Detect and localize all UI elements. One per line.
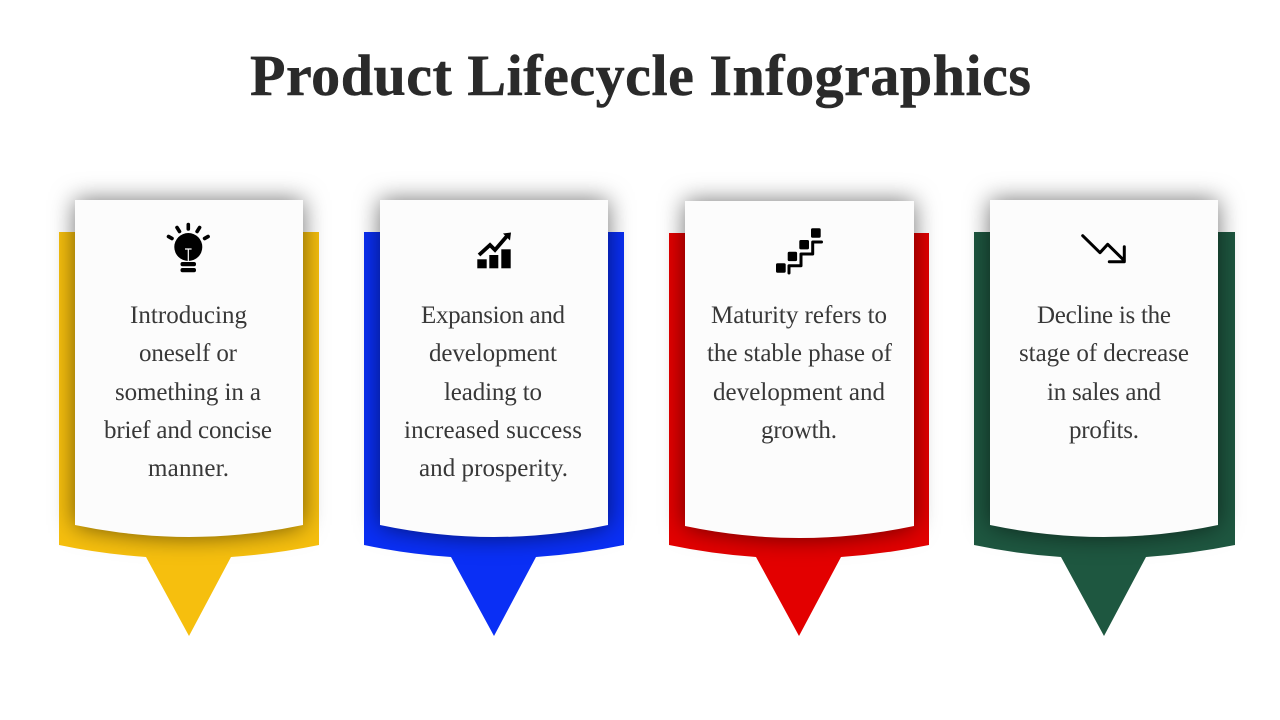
text: decline description (1019, 302, 1189, 444)
text: growth description: Expansion and (421, 302, 566, 329)
white card (685, 201, 914, 538)
text: decline description: in sales and (1047, 379, 1162, 406)
icon: stairs (776, 228, 822, 273)
yellow pointer banner (59, 232, 319, 636)
panel: growth (364, 200, 624, 636)
panel: maturity (669, 201, 929, 636)
text: maturity description: growth. (761, 417, 837, 444)
title: Product Lifecycle Infographics (250, 43, 1031, 108)
panel: decline (974, 200, 1235, 636)
red pointer banner (669, 233, 929, 636)
text: introduction description: oneself or (139, 340, 238, 367)
text: introduction description (104, 302, 272, 482)
text: decline description: profits. (1069, 417, 1139, 444)
text: growth description: leading to (444, 379, 542, 406)
panel: introduction (59, 200, 319, 636)
green pointer banner (974, 232, 1235, 636)
text: decline description: Decline is the (1037, 302, 1171, 329)
text: introduction description: something in a (115, 379, 261, 406)
white card (990, 200, 1218, 537)
white card (75, 200, 303, 537)
icon: light bulb (168, 224, 208, 272)
white card (380, 200, 608, 537)
text: maturity description: Maturity refers to (711, 302, 887, 329)
text: maturity description (707, 302, 893, 444)
text: growth description: increased success (404, 417, 582, 444)
text: introduction description: Introducing (130, 302, 248, 329)
text: introduction description: manner. (148, 455, 229, 482)
icon: rising bar chart (477, 232, 511, 268)
icon: falling arrow (1083, 236, 1124, 262)
text: introduction description: brief and concise (104, 417, 272, 444)
text: maturity description: the stable phase of (707, 340, 893, 367)
text: maturity description: development and (713, 379, 886, 406)
text: decline description: stage of decrease (1019, 340, 1189, 367)
text: growth description: and prosperity. (419, 455, 568, 482)
text: growth description: development (429, 340, 557, 367)
blue pointer banner (364, 232, 624, 636)
text: growth description (404, 302, 582, 482)
